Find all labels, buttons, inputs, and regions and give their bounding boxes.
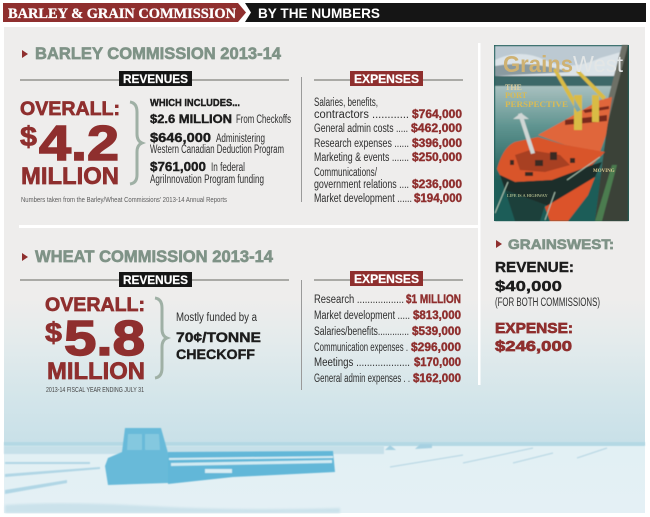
barley expenses label: EXPENSES (354, 74, 419, 86)
barley revenues label (20, 71, 289, 86)
barley expenses list: $462,000 (411, 123, 462, 135)
wheat expenses label: EXPENSES (354, 274, 419, 286)
barley overall total: MILLION (21, 163, 119, 190)
wheat expenses list: Market development ..... (314, 310, 410, 322)
grainswest revenue: (FOR BOTH COMMISSIONS) (495, 297, 600, 309)
wheat overall total: OVERALL: (45, 294, 145, 316)
header title left: BARLEY & GRAIN COMMISSION (8, 6, 237, 22)
cover headline line two: PORT (505, 91, 528, 100)
barley revenue breakdown: AgriInnovation Program funding (150, 174, 264, 186)
wheat expenses list: $1 MILLION (406, 294, 461, 306)
wheat revenues label (20, 272, 289, 287)
wheat fiscal note: 2013-14 FISCAL YEAR ENDING JULY 31 (46, 385, 144, 394)
wheat expenses list: $296,000 (411, 342, 461, 354)
barley expenses list (314, 97, 462, 205)
wheat heading: WHEAT COMMISSION 2013-14 (35, 247, 274, 266)
tractor and swather in field (105, 428, 335, 485)
magazine cover: GrainsWest (494, 45, 629, 221)
wheat expenses list: $539,000 (412, 326, 461, 338)
grainswest revenue: $40,000 (495, 278, 562, 295)
wheat revenue description: CHECKOFF (176, 346, 255, 362)
cover story: moving on up: MOVING (593, 169, 615, 174)
wheat expenses list: General admin expenses . . (314, 373, 410, 385)
wheat expenses label (314, 271, 463, 286)
panel: barley commission (20, 44, 463, 205)
barley expenses label (314, 71, 463, 86)
barley overall total (20, 98, 120, 190)
cover story: life is a highway: LIFE IS A HIGHWAY (507, 193, 548, 198)
barley revenues label: REVENUES (123, 74, 188, 86)
wheat expenses list: $162,000 (413, 373, 461, 385)
wheat overall total (45, 294, 145, 385)
grainswest expense: EXPENSE: (495, 320, 573, 337)
barley brace (130, 102, 142, 184)
barley overall total: $ (20, 121, 37, 152)
barley expenses list: Communications/ (314, 167, 378, 179)
barley revenue breakdown: From Checkoffs (236, 114, 291, 126)
barley overall total: OVERALL: (20, 98, 120, 120)
grainswest heading: GRAINSWEST: (508, 236, 614, 252)
wheat expenses list: $170,000 (414, 357, 461, 369)
wheat revenue description: 70¢/TONNE (176, 329, 261, 345)
wheat overall total: $ (45, 317, 62, 348)
barley column rule (301, 77, 302, 202)
wheat expenses list (314, 294, 461, 385)
grainswest revenue (495, 259, 600, 309)
cover headline line three: PERSPECTIVE (505, 99, 568, 109)
barley overall total: 4.2 (39, 117, 119, 171)
wheat section marker (22, 253, 28, 261)
wheat column rule (301, 280, 302, 390)
barley expenses list: $250,000 (412, 152, 462, 164)
wheat revenue description: Mostly funded by a (176, 312, 258, 324)
barley expenses list: government relations .... (314, 179, 409, 191)
barley revenue breakdown: WHICH INCLUDES... (150, 97, 240, 109)
wheat expenses list: Meetings .................... (314, 357, 410, 369)
barley expenses list: $194,000 (414, 193, 462, 205)
barley revenue breakdown: Administering (216, 133, 265, 145)
grainswest expense: $246,000 (495, 338, 572, 355)
barley expenses list: Research expenses ...... (314, 138, 409, 150)
wheat overall total: MILLION (47, 358, 145, 385)
barley revenue breakdown: $761,000 (150, 159, 206, 174)
grainswest expense (495, 320, 573, 355)
barley section marker (22, 50, 28, 58)
barley expenses list: contractors ............ (314, 109, 409, 121)
white dividers (19, 43, 480, 385)
header banner (3, 3, 646, 22)
barley expenses list: Salaries, benefits, (314, 97, 378, 109)
wheat revenues label: REVENUES (123, 275, 188, 287)
barley revenue breakdown: $646,000 (150, 130, 211, 145)
wheat expenses list: Communication expenses . (314, 342, 408, 354)
cover masthead second part: West (573, 51, 624, 77)
grainswest marker (496, 240, 502, 248)
panel: wheat commission (20, 247, 463, 394)
wheat overall total: 5.8 (64, 312, 145, 366)
barley expenses list: Market development ...... (314, 193, 412, 205)
barley revenue breakdown: $2.6 MILLION (150, 112, 232, 126)
barley expenses list: $396,000 (412, 138, 462, 150)
barley revenue breakdown: In federal (211, 162, 245, 174)
wheat expenses list: Research .................. (314, 294, 404, 306)
wheat expenses list: Salaries/benefits............. (314, 326, 409, 338)
wheat expenses list: $813,000 (413, 310, 461, 322)
barley source note: Numbers taken from the Barley/Wheat Commissions' 2013-14 Annual Reports (21, 195, 227, 204)
barley revenue breakdown (150, 97, 291, 186)
barley expenses list: $236,000 (412, 179, 462, 191)
header title right: BY THE NUMBERS (258, 5, 380, 21)
panel: grainswest stats (495, 236, 614, 355)
cover headline: THE (505, 83, 522, 92)
wheat brace (155, 298, 167, 378)
barley revenue breakdown: Western Canadian Deduction Program (150, 144, 284, 156)
cover masthead: Grains (503, 51, 573, 77)
barley expenses list: General admin costs ..... (314, 123, 408, 135)
wheat revenue description (176, 312, 261, 362)
barley expenses list: $764,000 (412, 109, 462, 121)
barley expenses list: Marketing & events ....... (314, 152, 409, 164)
grainswest revenue: REVENUE: (495, 259, 574, 276)
barley heading: BARLEY COMMISSION 2013-14 (35, 44, 282, 63)
